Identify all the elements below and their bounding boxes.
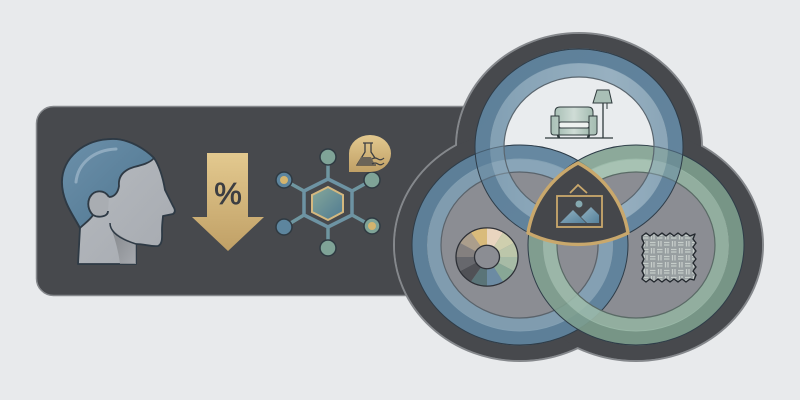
venn ring: right green bbox=[528, 145, 744, 345]
icon: molecule bbox=[276, 149, 380, 256]
venn: inner discs bbox=[441, 77, 715, 318]
icon: percent down arrow bbox=[192, 153, 264, 251]
icon: color wheel bbox=[456, 228, 518, 286]
icon: woven textile swatch bbox=[642, 233, 696, 282]
icon: flask badge bbox=[349, 135, 391, 172]
icon: framed landscape bbox=[557, 185, 602, 227]
venn ring: top blue overlay bbox=[475, 49, 683, 245]
venn backing silhouette bbox=[394, 33, 763, 361]
venn ring: top blue base bbox=[482, 56, 676, 238]
icon: sofa and floor lamp bbox=[545, 90, 613, 138]
venn ring: left blue bbox=[412, 145, 628, 345]
icon: head profile bbox=[62, 139, 175, 264]
icon: percent down arrow: % bbox=[214, 176, 242, 211]
panel: dark banner bbox=[36, 106, 506, 296]
center intersection badge bbox=[528, 163, 628, 244]
